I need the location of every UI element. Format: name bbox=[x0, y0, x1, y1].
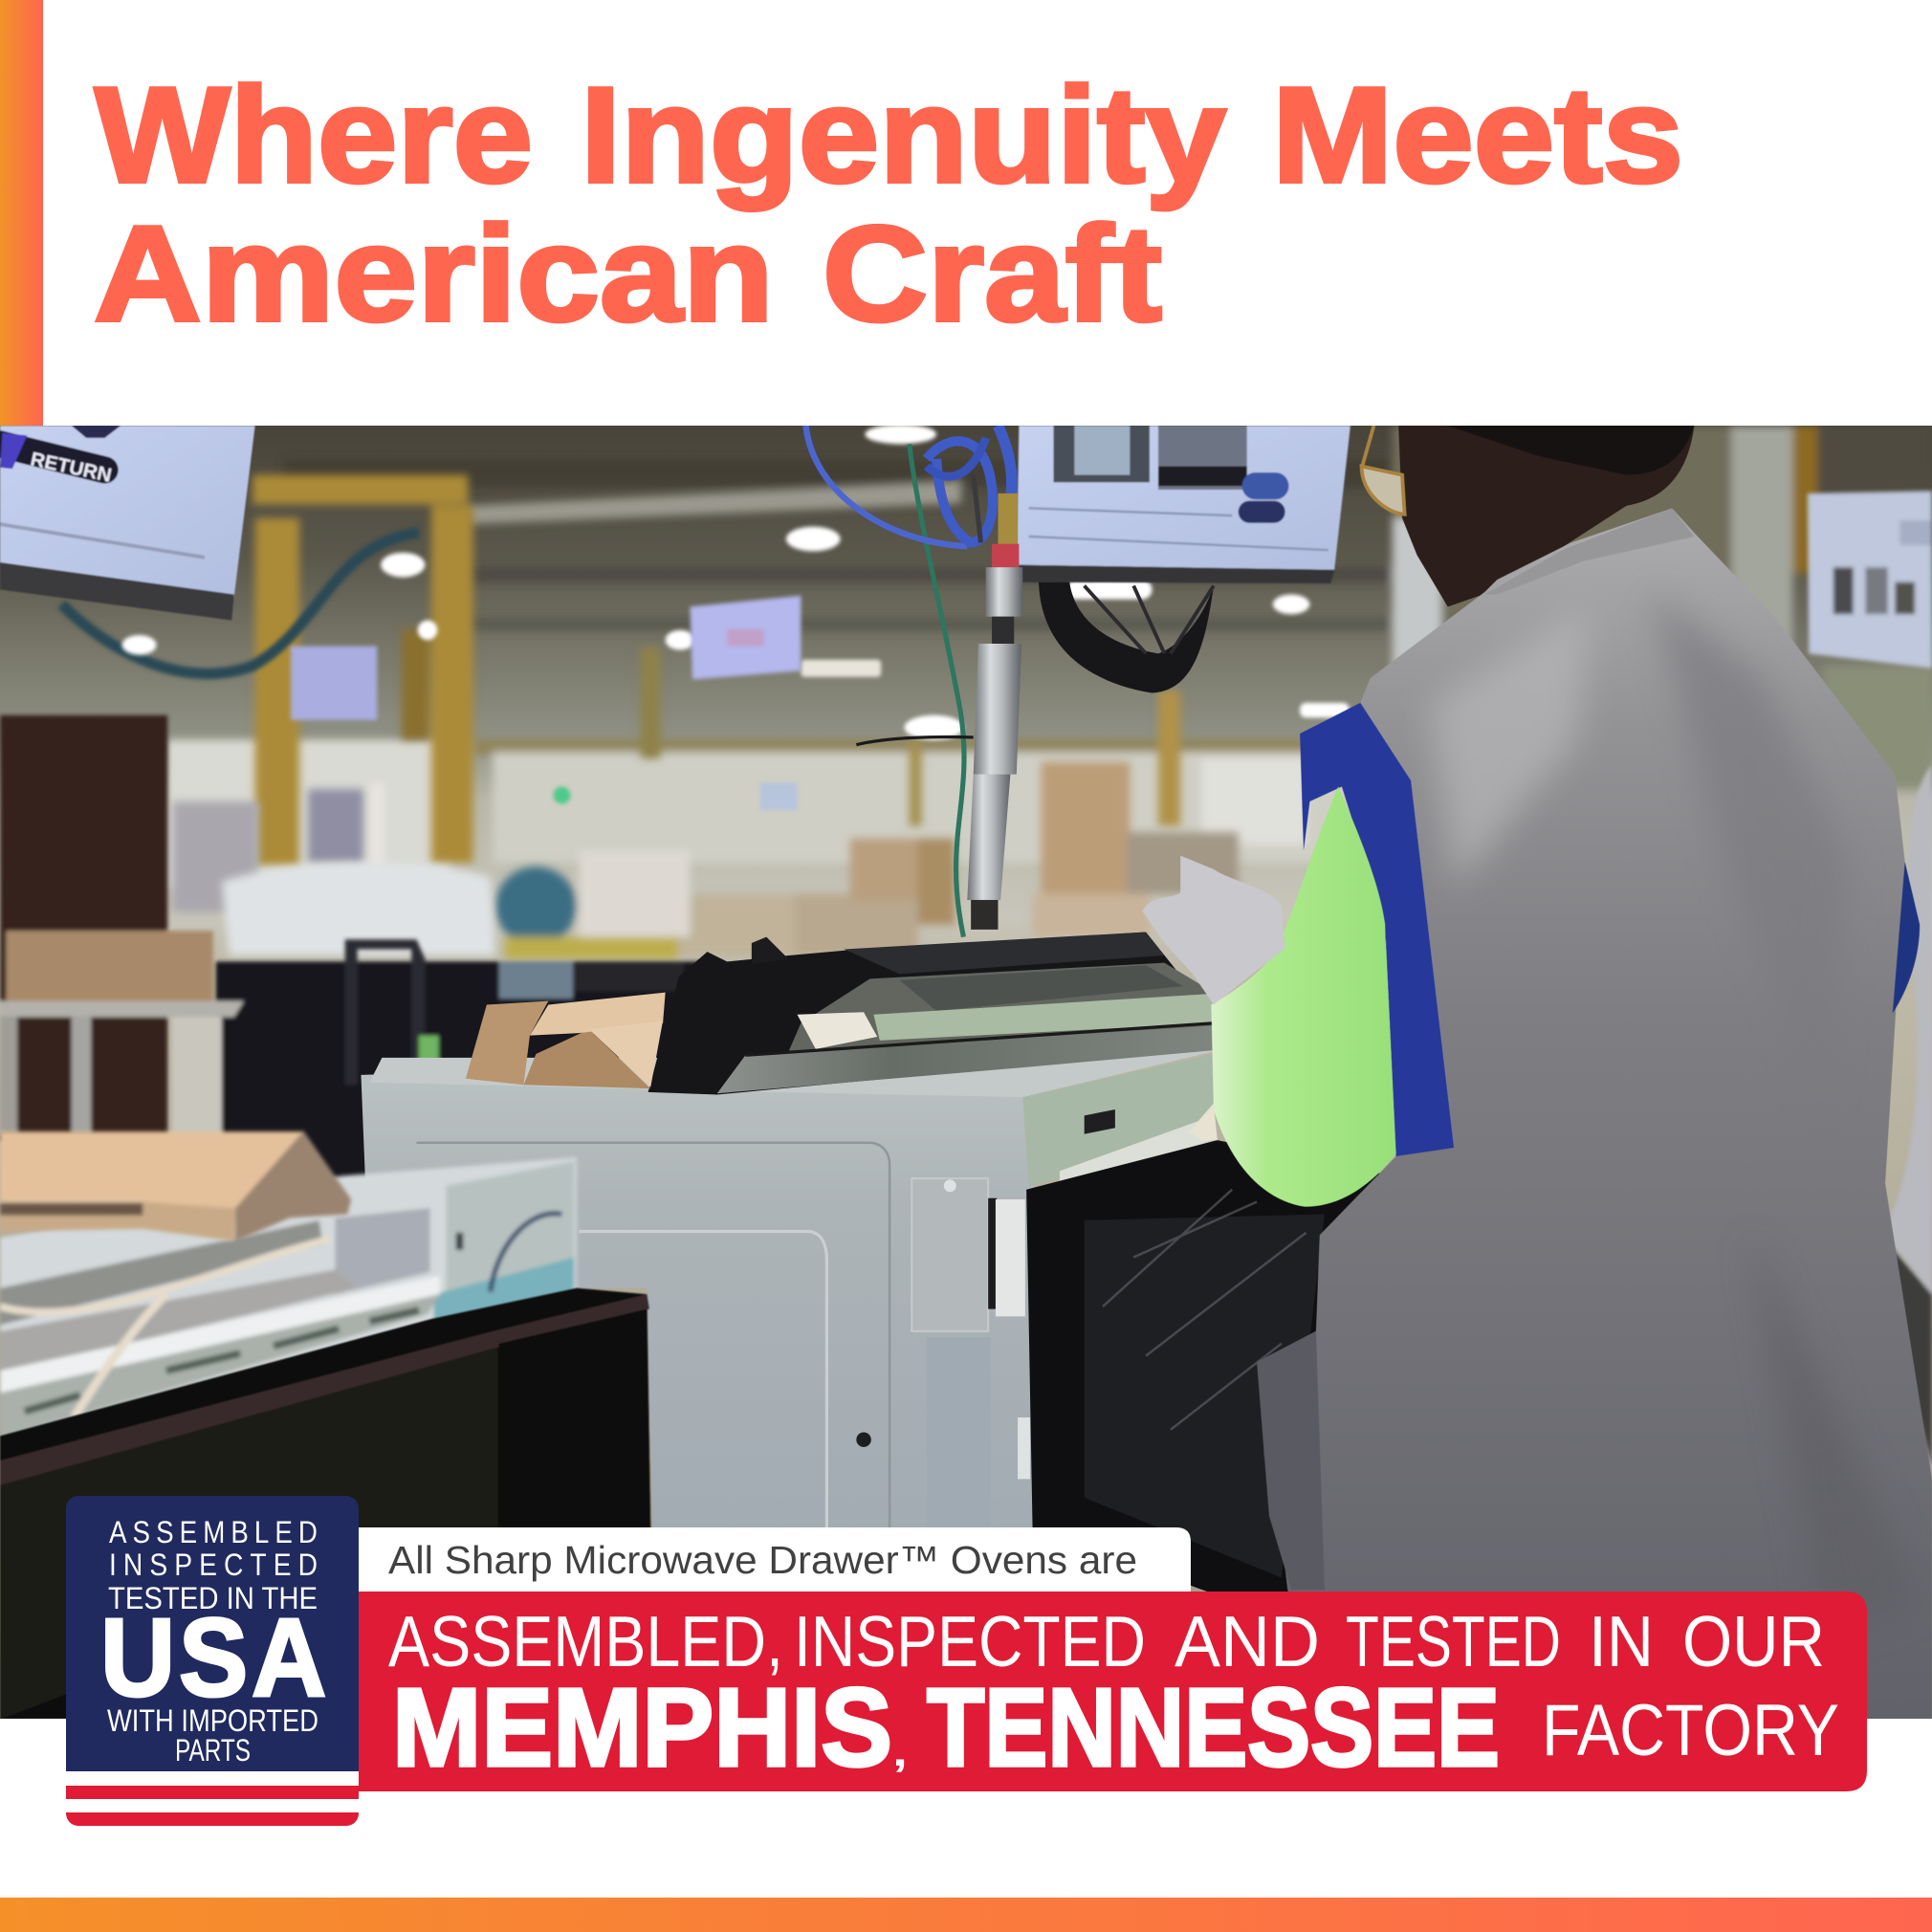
title: Ingenuity bbox=[581, 59, 1226, 211]
banner line one: TESTED bbox=[1346, 1601, 1561, 1681]
blurred factory background bbox=[0, 425, 1932, 1720]
badge text: ASSEMBLED bbox=[109, 1515, 323, 1549]
foreground cardboard bbox=[0, 1131, 351, 1241]
banner line one: ASSEMBLED, bbox=[388, 1601, 783, 1681]
monitor cables bbox=[1039, 582, 1214, 693]
worker: blue vest trim bbox=[1300, 703, 1454, 1156]
badge text: TESTED IN THE bbox=[108, 1581, 318, 1615]
foreground black oven bbox=[0, 1288, 653, 1720]
worker: green sleeve bbox=[1211, 786, 1396, 1207]
title: Where bbox=[95, 59, 533, 211]
banner line one: IN bbox=[1589, 1601, 1654, 1681]
oven control panel part bbox=[648, 932, 1214, 1095]
red banner bbox=[359, 1592, 1867, 1791]
green indicator bbox=[553, 786, 570, 803]
title: Craft bbox=[823, 198, 1162, 350]
ceiling lights bbox=[122, 425, 1350, 739]
stock and boxes bbox=[172, 762, 1239, 959]
banner line two: MEMPHIS bbox=[392, 1665, 892, 1789]
worker: vest bbox=[1257, 508, 1932, 1720]
USA badge bbox=[66, 1496, 359, 1826]
banner line two: TENNESSEE bbox=[927, 1665, 1500, 1789]
banner line two bbox=[392, 1665, 1839, 1789]
left monitor: RETURN bbox=[29, 449, 114, 487]
badge text: USA bbox=[100, 1595, 330, 1720]
distant screens bbox=[291, 596, 801, 810]
factory photo bbox=[0, 426, 1932, 1719]
banner line two: , bbox=[892, 1728, 908, 1775]
dark cabinet and crates bbox=[0, 715, 709, 1196]
oven wire bundle bbox=[1189, 1104, 1218, 1140]
center monitor bbox=[1013, 426, 1350, 583]
callout intro text: All Sharp Microwave Drawer™ Ovens are bbox=[388, 1538, 1137, 1582]
callout tab bbox=[359, 1527, 1191, 1592]
banner line one bbox=[388, 1601, 1825, 1681]
badge text bbox=[100, 1515, 330, 1767]
accent stripe bbox=[0, 0, 43, 426]
foreground tray bbox=[0, 1157, 577, 1438]
title: American bbox=[94, 198, 774, 350]
oven door with plastic wrap bbox=[1026, 1140, 1398, 1596]
worker: glove bbox=[1142, 856, 1285, 1004]
badge text: PARTS bbox=[175, 1733, 251, 1767]
left monitor bbox=[0, 426, 255, 621]
right monitor bbox=[1808, 491, 1932, 669]
worker: head and glasses bbox=[1362, 426, 1694, 606]
hanging cable bbox=[61, 533, 419, 673]
second worker bbox=[1879, 764, 1932, 1467]
white plastic stack bbox=[222, 863, 495, 955]
banner line one: OUR bbox=[1682, 1601, 1825, 1681]
yellow steel columns bbox=[252, 475, 1180, 866]
badge text: WITH IMPORTED bbox=[107, 1703, 318, 1738]
banner line two: FACTORY bbox=[1542, 1690, 1839, 1771]
oven body bbox=[361, 1043, 1218, 1541]
title bbox=[94, 59, 1683, 350]
banner line one: INSPECTED bbox=[794, 1601, 1146, 1681]
footer bar bbox=[0, 1898, 1932, 1932]
badge text: INSPECTED bbox=[109, 1548, 324, 1582]
title: Meets bbox=[1272, 59, 1683, 211]
banner line one: AND bbox=[1175, 1601, 1320, 1681]
flat cardboard on oven bbox=[466, 993, 666, 1088]
air tool and hose bbox=[806, 426, 1022, 937]
